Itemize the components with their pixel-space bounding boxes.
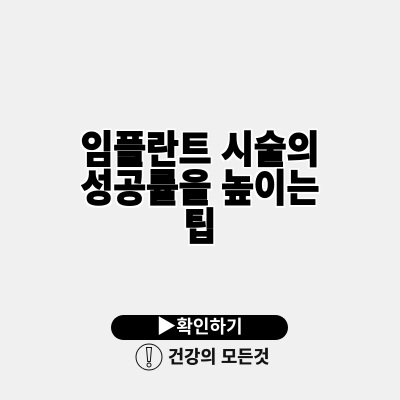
title: 임플란트 시술의 [81, 129, 319, 172]
icon: exclamation circle [136, 344, 162, 370]
title: 성공률을 높이는 [81, 167, 319, 210]
button: confirm [111, 315, 288, 340]
brand name: 건강의 모든것 [168, 347, 269, 367]
footer: health brand [136, 344, 269, 370]
title: 팁 [184, 206, 216, 249]
title [80, 128, 320, 249]
button: confirm: ▶확인하기 [156, 316, 243, 338]
